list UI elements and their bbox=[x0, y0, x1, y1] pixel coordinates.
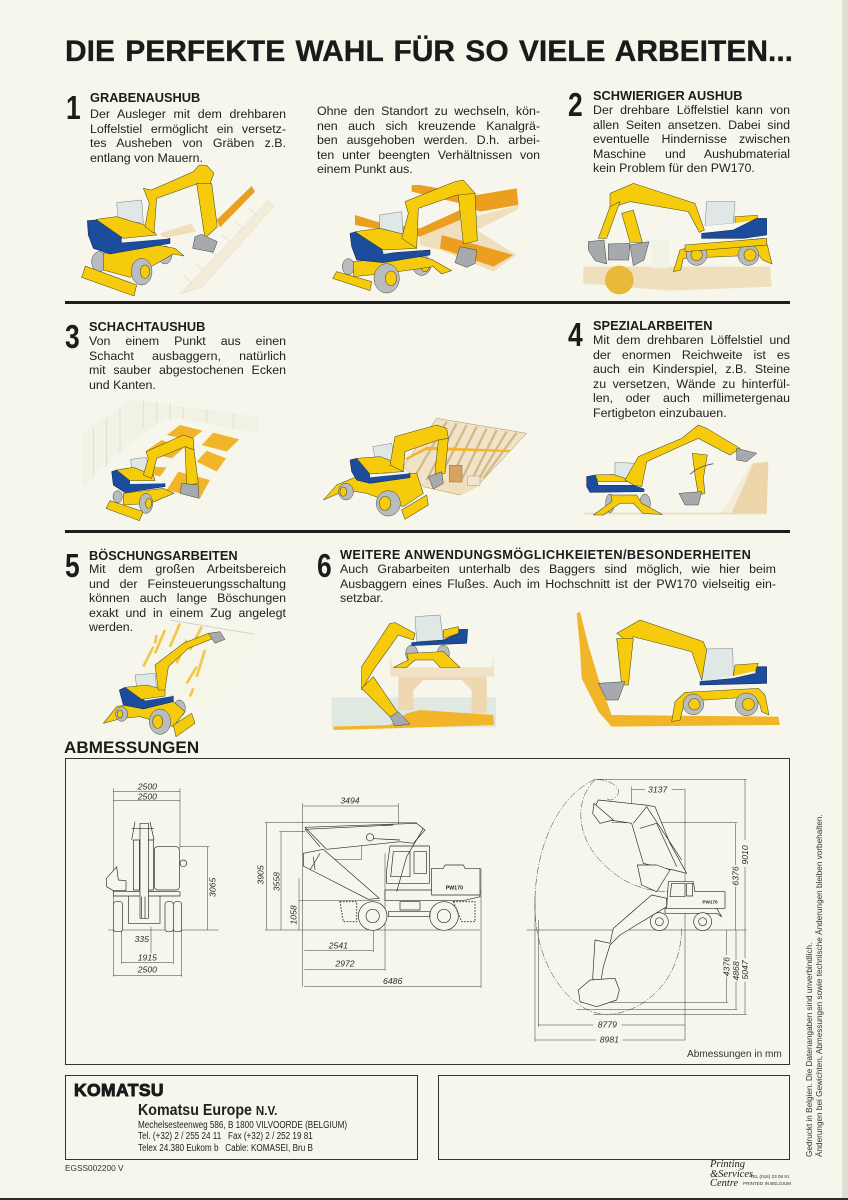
text block: zu versetzen, Wände zu hinterfül- bbox=[593, 377, 790, 391]
text block: middle column: einem Punkt aus. bbox=[317, 162, 413, 176]
panel: 3 Schachtaushub bbox=[65, 318, 527, 521]
text block: der enormen Reichweite ist es bbox=[593, 348, 790, 362]
printer mark: &Services bbox=[710, 1169, 753, 1180]
number 5: 5 bbox=[65, 547, 80, 584]
diagram: working range: 4868 bbox=[731, 961, 741, 981]
printer mark: PRINTED IN BELGIUM bbox=[743, 1181, 791, 1186]
address: Mechelsesteenweg 586, B 1800 VILVOORDE (BELGIUM) bbox=[138, 1120, 347, 1131]
printer mark: Centre bbox=[710, 1178, 738, 1189]
text block: Maschine und Aushubmaterial bbox=[593, 147, 790, 161]
number 6: 6 bbox=[317, 547, 332, 584]
text block bbox=[593, 333, 790, 420]
panel: 6 Weitere Anwendungsmöglichkeiten bbox=[317, 547, 780, 730]
diagram: working range: 3137 bbox=[648, 785, 668, 795]
panel: empty address box bbox=[438, 1075, 790, 1160]
unit note: Abmessungen in mm bbox=[687, 1049, 782, 1060]
text block: Der Ausleger mit dem drehbaren bbox=[90, 107, 286, 121]
diagram: front view: 2500 bbox=[137, 965, 157, 975]
heading: BÖSCHUNGSARBEITEN bbox=[89, 548, 238, 563]
text block: eventuelle Hindernisse zwischen bbox=[593, 132, 790, 146]
heading: SCHACHTAUSHUB bbox=[89, 319, 205, 334]
text block: Der drehbare Löffelstiel kann von bbox=[593, 103, 790, 117]
logo: Komatsu: KOMATSU bbox=[74, 1080, 164, 1100]
number 3: 3 bbox=[65, 318, 80, 355]
panel: 1 Grabenausbub bbox=[66, 89, 540, 296]
diagram: side view: 1058 bbox=[289, 905, 299, 925]
address: Telex 24.380 Eukom b Cable: KOMASEI, Bru B bbox=[138, 1143, 313, 1154]
text block: setzbar. bbox=[340, 591, 383, 605]
document code: EGSS002200 V bbox=[65, 1163, 124, 1173]
heading: GRABENAUSHUB bbox=[90, 90, 200, 105]
panel: 4 Spezialarbeiten bbox=[568, 316, 790, 516]
text block: Mit dem großen Arbeitsbereich bbox=[89, 562, 286, 576]
text block: kein Problem für den PW170. bbox=[593, 161, 755, 175]
text block: allen Seiten ansetzen. Dabei sind bbox=[593, 118, 790, 132]
diagram: front view: 2500 bbox=[137, 792, 157, 802]
text block: Loffelstiel ermöglicht ein versetz- bbox=[90, 122, 286, 136]
panel: Komatsu address bbox=[65, 1075, 418, 1160]
diagram: working range: 5047 bbox=[740, 959, 750, 980]
diagram: side view: 3494 bbox=[340, 795, 360, 805]
side note: line 1: Gedruckt in Belgien. Die Datenangaben sind unverbindlich. bbox=[805, 943, 814, 1157]
illustration: excavator on outriggers with slope bbox=[583, 424, 768, 516]
text block: middle column bbox=[317, 104, 540, 176]
printer mark: TEL (016) 23 08 91 bbox=[750, 1174, 789, 1179]
text block: len, oder auch millimetergenau bbox=[593, 391, 790, 405]
diagram: front view: 335 bbox=[134, 934, 149, 944]
diagram: front view: 3065 bbox=[207, 878, 217, 897]
text block: Fertigbeton einzubauen. bbox=[593, 406, 727, 420]
text block bbox=[89, 334, 286, 392]
text block bbox=[90, 107, 286, 165]
diagram: working range: 8981 bbox=[600, 1035, 619, 1045]
printer mark bbox=[710, 1159, 791, 1189]
side note: line 2: Änderungen bei Gewichten, Abmessungen sowie technische Änderungen bleiben vorbehalten. bbox=[815, 814, 824, 1157]
text block: exakt und in einem Zug angelegt bbox=[89, 606, 286, 620]
diagram: side view: PW170 bbox=[446, 885, 463, 891]
text block: können auch lange Böschungen bbox=[89, 591, 286, 605]
text block bbox=[89, 562, 286, 634]
text block: Auch Grabarbeiten unterhalb des Baggers sind möglich, wie hier beim bbox=[340, 562, 776, 576]
illustration: high cut excavation bbox=[576, 612, 780, 727]
text block: entlang von Mauern. bbox=[90, 151, 203, 165]
illustration: excavator crossing trenches bbox=[332, 180, 520, 294]
divider bbox=[65, 301, 790, 304]
diagram: front view bbox=[106, 781, 218, 977]
diagram: side view: 6486 bbox=[383, 976, 402, 986]
diagram: working range: 8779 bbox=[598, 1020, 617, 1030]
text block bbox=[593, 103, 790, 175]
diagram: side view: 3905 bbox=[256, 865, 266, 885]
text block: middle column: ben ausgehoben werden. D.h. arbei- bbox=[317, 133, 540, 147]
illustration: excavator along wall bbox=[81, 164, 274, 296]
text block: Von einem Punkt aus einen bbox=[89, 334, 286, 348]
text block: Ausbaggern eines Flußes. Auch im Hochschnitt ist der PW170 vielseitig ein- bbox=[340, 577, 776, 591]
divider bbox=[65, 530, 790, 533]
heading: WEITERE ANWENDUNGSMÖGLICHKEIETEN/BESONDERHEITEN bbox=[340, 547, 751, 562]
company name: Komatsu Europe N.V. bbox=[138, 1102, 277, 1119]
diagram: front view: 1915 bbox=[138, 953, 157, 963]
text block bbox=[340, 562, 776, 605]
text block: werden. bbox=[89, 620, 133, 634]
diagram: working range: 6376 bbox=[731, 866, 741, 886]
text block: middle column: ten unter beengten Verhältnissen von bbox=[317, 148, 540, 162]
illustration: river dredging from platform bbox=[332, 614, 496, 730]
number 1: 1 bbox=[66, 89, 81, 126]
panel: 5 Böschungsarbeiten bbox=[65, 547, 286, 737]
printer mark: Printing bbox=[710, 1159, 745, 1170]
text block: und der Feinsteuerungsschaltung bbox=[89, 577, 286, 591]
illustration: excavator on slope bbox=[103, 620, 254, 737]
page edge shading bbox=[842, 0, 848, 1200]
diagram: front view: 2500 bbox=[137, 781, 157, 791]
bottom edge bbox=[0, 1198, 848, 1200]
address: Tel. (+32) 2 / 255 24 11 Fax (+32) 2 / 252 19 81 bbox=[138, 1131, 313, 1142]
panel: 2 Schwieriger Aushub bbox=[568, 86, 790, 294]
text block: Mit dem drehbaren Löffelstiel und bbox=[593, 333, 790, 347]
number 2: 2 bbox=[568, 86, 583, 123]
heading: SPEZIALARBEITEN bbox=[593, 318, 712, 333]
diagram: working range: 4376 bbox=[722, 957, 732, 976]
diagram: side view: 2972 bbox=[334, 959, 355, 969]
diagram: working range bbox=[526, 779, 750, 1045]
heading: SCHWIERIGER AUSHUB bbox=[593, 88, 743, 103]
text block: auch ein Kinderspiel, z.B. Steine bbox=[593, 362, 790, 376]
text block: mit sauber abgestochenen Ecken bbox=[89, 363, 286, 377]
diagram: working range: 9010 bbox=[740, 845, 750, 865]
diagram: side view bbox=[256, 795, 482, 988]
text block: Schacht ausbaggern, natürlich bbox=[89, 349, 286, 363]
text block: middle column: Ohne den Standort zu wechseln, kön- bbox=[317, 104, 540, 118]
address bbox=[138, 1120, 347, 1154]
diagram: side view: 3558 bbox=[271, 872, 281, 891]
number 4: 4 bbox=[568, 316, 583, 353]
heading: Abmessungen: ABMESSUNGEN bbox=[64, 738, 199, 757]
title: DIE PERFEKTE WAHL FÜR SO VIELE ARBEITEN... bbox=[65, 35, 793, 68]
panel: dimension drawings bbox=[65, 758, 790, 1065]
text block: und Kanten. bbox=[89, 378, 156, 392]
diagram: working range: PW170 bbox=[702, 899, 718, 904]
diagram: side view: 2541 bbox=[328, 940, 348, 950]
text block: middle column: nen auch sich kreuzende Kanalgrä- bbox=[317, 119, 540, 133]
illustration: shaft excavation scenes bbox=[92, 400, 527, 521]
text block: tes Ausheben von Gräben z.B. bbox=[90, 136, 286, 150]
illustration: excavator lifting boulder bbox=[583, 183, 772, 294]
